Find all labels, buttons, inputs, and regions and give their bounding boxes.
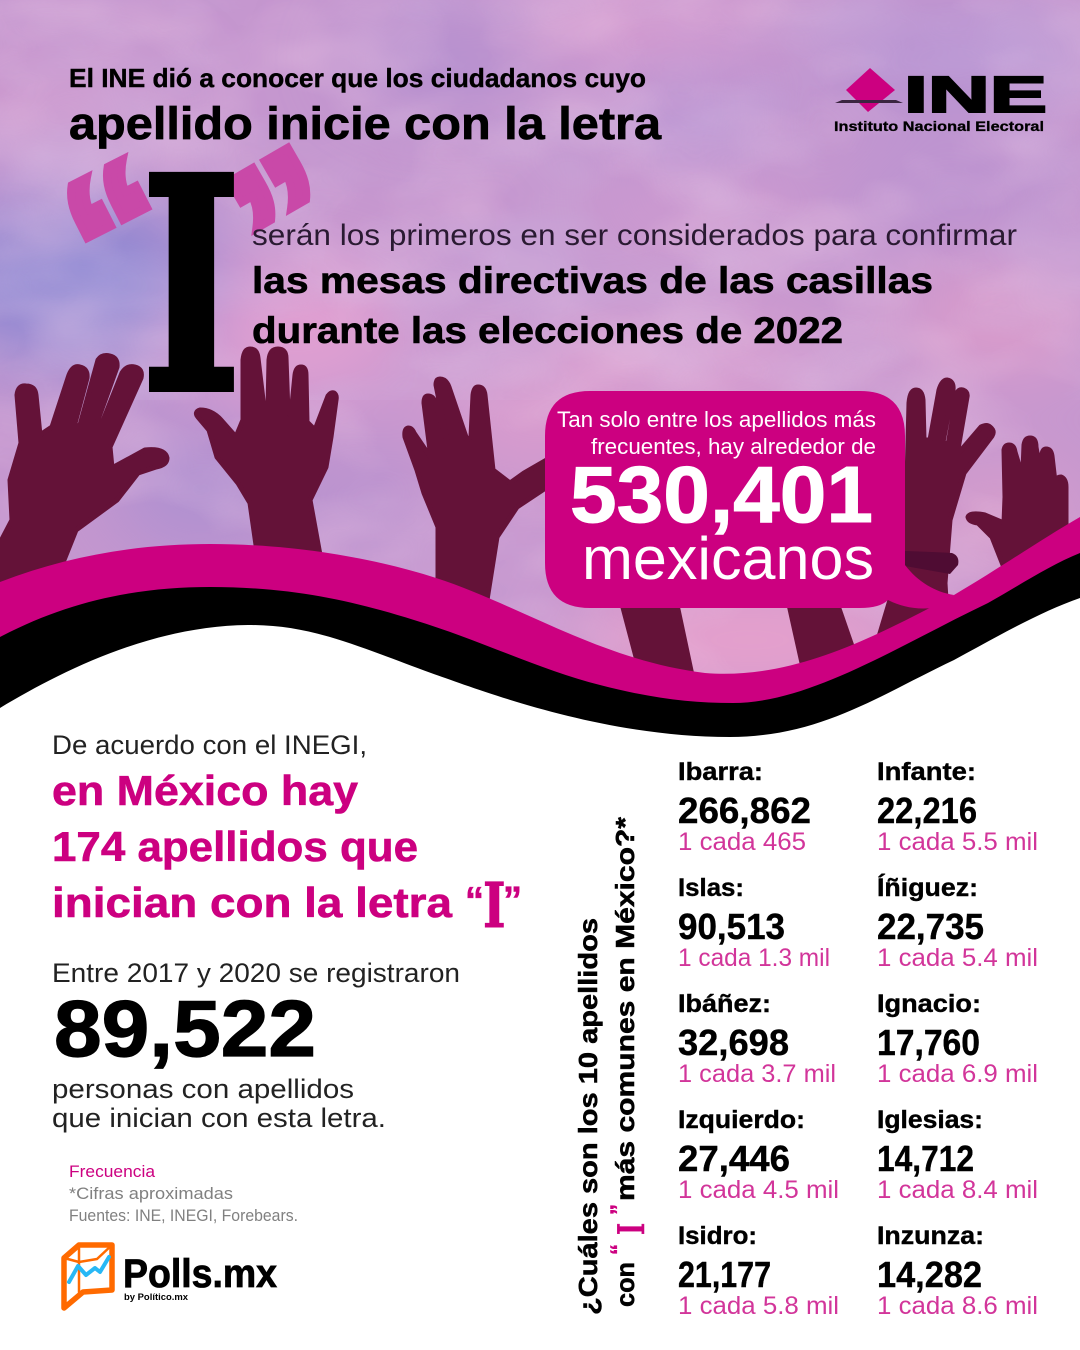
text: first round of notification: serán los primeros en ser considerados para confirmar: [252, 219, 1017, 252]
Ibáñez: [678, 990, 836, 1088]
Iglesias: 14,712: [877, 1138, 974, 1179]
background: purple and pink sky photo: [0, 0, 1080, 674]
hand 4: [877, 378, 996, 634]
wave: black band: [0, 553, 1080, 760]
Izquierdo: Izquierdo:: [678, 1106, 805, 1134]
Infante: [877, 758, 1038, 856]
notes and sources: Frecuencia: [69, 1163, 156, 1181]
vertical heading: top 10 question: ¿Cuáles son los 10 apellidos: [573, 918, 603, 1315]
pink statement: en México hay: [52, 767, 359, 814]
raised hands silhouettes: [0, 349, 1066, 680]
pink statement: 174 apellidos que: [52, 823, 418, 870]
Islas: [678, 874, 830, 972]
Infante: 22,216: [877, 790, 977, 831]
Ibarra: 1 cada 465: [678, 828, 806, 856]
INE full name: Instituto Nacional Electoral: [834, 118, 1044, 134]
Infante: 1 cada 5.5 mil: [877, 828, 1038, 856]
vertical heading: top 10 question: I: [612, 1223, 653, 1235]
logo: INE: [834, 66, 1047, 134]
text: people with surnames: que inician con esta letra.: [52, 1103, 386, 1133]
callout intro line 2: frecuentes, hay alrededor de: [591, 434, 876, 459]
Ignacio: Ignacio:: [877, 990, 981, 1018]
Islas: 90,513: [678, 906, 785, 947]
icon: ballot diamond: [846, 68, 895, 112]
Isidro: 21,177: [678, 1254, 771, 1295]
hand 1: [0, 356, 167, 600]
headline intro: El INE dió a conocer que los ciudadanos cuyo: [69, 63, 646, 93]
wave: white lower panel: [0, 598, 1080, 1350]
Íñiguez: 22,735: [877, 906, 984, 947]
Íñiguez: [877, 873, 1038, 972]
callout number: 530,401: [570, 450, 873, 539]
Ibarra: Ibarra:: [678, 758, 763, 786]
Polls.mx wordmark: Polls.mx: [123, 1252, 277, 1296]
notes and sources: Fuentes: INE, INEGI, Forebears.: [69, 1207, 298, 1225]
big letter I with quotes: [31, 104, 387, 457]
Ibáñez: Ibáñez:: [678, 990, 771, 1018]
pink statement: ”: [503, 880, 522, 922]
Iglesias: [877, 1106, 1038, 1204]
pink statement: I: [483, 870, 506, 943]
Inzunza: 14,282: [877, 1254, 982, 1295]
INE wordmark: INE: [904, 66, 1047, 123]
Íñiguez: 1 cada 5.4 mil: [877, 944, 1038, 972]
Ignacio: 17,760: [877, 1022, 980, 1063]
Ibarra: [678, 758, 811, 856]
Iglesias: Iglesias:: [877, 1106, 983, 1134]
text: people with surnames: personas con apellidos: [52, 1074, 354, 1104]
callout bubble: 530,401 mexicanos: [545, 391, 954, 609]
Isidro: 1 cada 5.8 mil: [678, 1292, 839, 1320]
pink statement: “: [465, 880, 484, 922]
icon: orange speech cube with trend line: [64, 1245, 112, 1308]
letter I: I: [142, 114, 241, 457]
text: according to INEGI: De acuerdo con el INEGI,: [52, 730, 367, 760]
notes and sources: [69, 1163, 298, 1225]
hand 3: [405, 379, 550, 600]
Ibáñez: 32,698: [678, 1022, 789, 1063]
Iglesias: 1 cada 8.4 mil: [877, 1176, 1038, 1204]
vertical heading: top 10 question: ”: [606, 1204, 631, 1215]
text: 2017 to 2020: Entre 2017 y 2020 se registraron: [52, 958, 460, 988]
Infante: Infante:: [877, 758, 976, 786]
notes and sources: *Cifras aproximadas: [69, 1185, 233, 1203]
Ibarra: 266,862: [678, 790, 811, 831]
Ignacio: 1 cada 6.9 mil: [877, 1060, 1038, 1088]
Izquierdo: 27,446: [678, 1138, 790, 1179]
pink statement: [52, 767, 522, 943]
vertical heading: top 10 question: con: [610, 1262, 640, 1307]
Íñiguez: Íñiguez:: [877, 873, 978, 902]
Izquierdo: 1 cada 4.5 mil: [678, 1176, 839, 1204]
pink statement: inician con la letra: [52, 879, 453, 926]
wave: pink band: [0, 517, 1080, 720]
left quote mark: “: [31, 115, 214, 351]
callout label: mexicanos: [582, 525, 874, 592]
Ignacio: [877, 990, 1038, 1088]
Isidro: Isidro:: [678, 1222, 757, 1250]
Inzunza: Inzunza:: [877, 1222, 984, 1250]
Inzunza: [877, 1222, 1038, 1320]
vertical heading: top 10 question: “: [606, 1244, 631, 1255]
forearms behind the bubble: [620, 608, 694, 672]
text: people with surnames: [52, 1074, 386, 1133]
text: bold line 1: las mesas directivas de las casillas: [252, 260, 933, 301]
surname list: column 2: [877, 758, 1038, 1320]
vertical heading: top 10 question: [573, 816, 653, 1315]
callout intro line 1: Tan solo entre los apellidos más: [557, 407, 876, 432]
Izquierdo: [678, 1106, 839, 1204]
hand 2: [196, 349, 336, 555]
surname list: column 1: [678, 758, 839, 1320]
Islas: Islas:: [678, 874, 744, 902]
logo: Polls.mx: [64, 1245, 277, 1308]
big number 89,522: 89,522: [54, 984, 316, 1073]
by Politico.mx: by Político.mx: [124, 1292, 189, 1303]
Islas: 1 cada 1.3 mil: [678, 944, 830, 972]
vertical heading: top 10 question: más comunes en México?*: [610, 816, 640, 1201]
Inzunza: 1 cada 8.6 mil: [877, 1292, 1038, 1320]
headline main line: apellido inicie con la letra: [69, 98, 662, 149]
text: bold line 2: durante las elecciones de 2022: [252, 310, 843, 351]
hand 5: [968, 438, 1066, 570]
Isidro: [678, 1222, 839, 1320]
Ibáñez: 1 cada 3.7 mil: [678, 1060, 836, 1088]
right quote mark: ”: [196, 104, 387, 339]
